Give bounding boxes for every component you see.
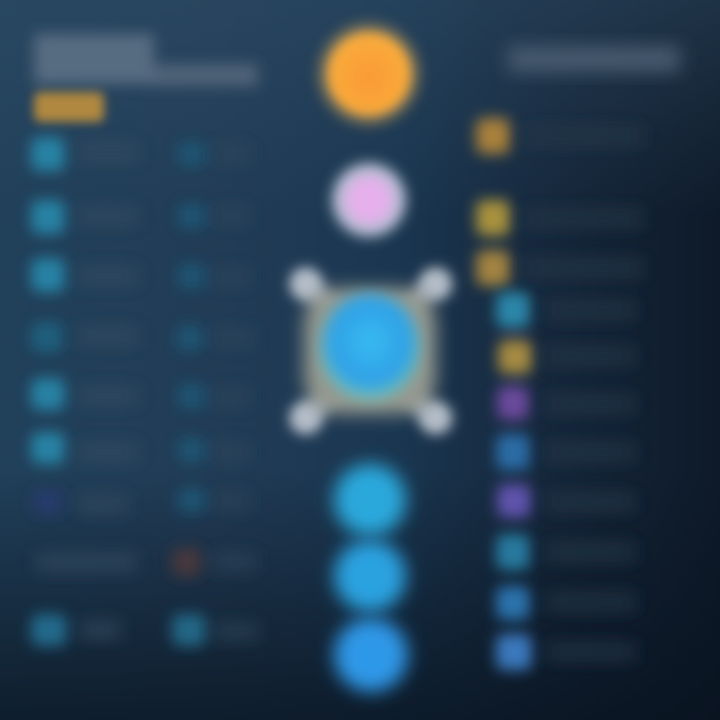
panel: right column labels xyxy=(524,130,644,658)
badge: orange label xyxy=(34,92,104,122)
icon: lilac sphere xyxy=(332,163,406,237)
icon: central gear ring with four arms xyxy=(290,268,452,434)
panel: left list labels xyxy=(36,146,138,636)
panel: second column icons xyxy=(172,142,206,646)
panel: left column heading xyxy=(34,34,258,86)
panel: right upper icons xyxy=(476,118,510,286)
panel: right column heading xyxy=(508,46,680,72)
icon: orange sphere xyxy=(319,24,419,124)
panel: left list icons xyxy=(31,137,67,646)
icon: blue spheres stack xyxy=(334,464,408,692)
panel: right lower icons xyxy=(496,292,532,670)
panel: second column labels xyxy=(212,148,258,637)
